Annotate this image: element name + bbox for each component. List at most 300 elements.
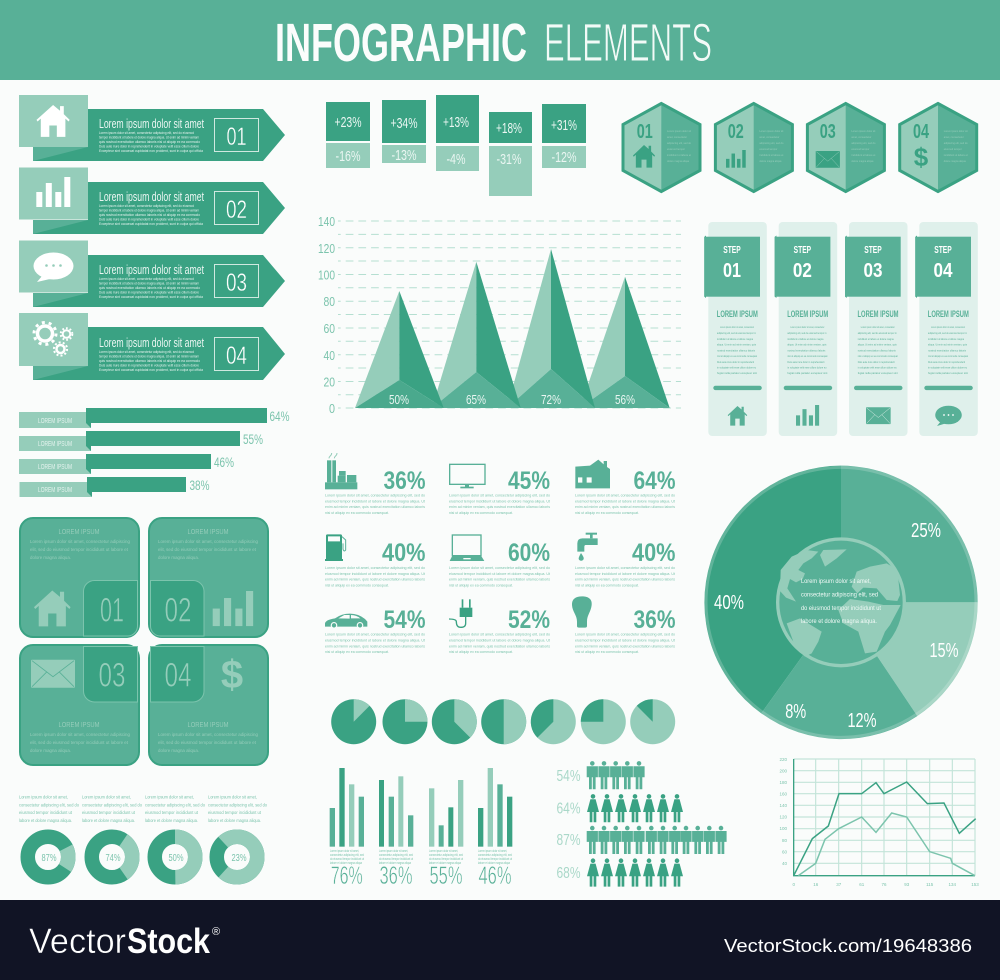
- step card 04: nisi ut aliquip ex ea commodo consequat: [928, 354, 968, 358]
- step card 04: nostrud exercitation ullamco laboris: [928, 348, 966, 352]
- triangle 56%: [580, 277, 670, 408]
- y axis labels: 60: [324, 321, 335, 336]
- title: ELEMENTS: [544, 13, 712, 73]
- pie 7: [630, 699, 675, 744]
- banner 03: 03: [226, 269, 247, 297]
- step card 03: STEP: [864, 244, 882, 256]
- stat texts: Lorem ipsum dolor sit amet, consectetur adipiscing elit, sed do: [449, 632, 550, 636]
- step card 01: Lorem ipsum dolor sit amet, consectetur: [720, 325, 754, 329]
- header band: [0, 0, 1000, 80]
- icon: house: [34, 590, 71, 626]
- slice 12% and 8%: [761, 602, 917, 739]
- step card 04: [915, 222, 978, 436]
- step card 04: in voluptate velit esse cillum dolore eu: [928, 366, 967, 370]
- stat texts: nisi ut aliquip ex ea commodo consequat.: [575, 511, 639, 515]
- triangle 65%: [432, 262, 521, 408]
- step card 04: aliqua. Ut enim ad minim veniam, quis: [928, 342, 967, 346]
- slice 15%: [841, 602, 978, 716]
- panel: tile 02: [149, 518, 268, 637]
- banner 03: [19, 240, 285, 307]
- banner 02: 02: [226, 196, 247, 224]
- bar group captions: labore et dolore magna aliqua: [429, 861, 461, 865]
- panel: tile 01: [20, 518, 139, 637]
- line chart: [779, 757, 979, 887]
- hexagon 02: 02: [728, 121, 744, 143]
- step card 04: adipiscing elit, sed do eiusmod tempor in: [928, 331, 967, 335]
- step card 03: LOREM IPSUM: [858, 309, 898, 319]
- banner title: Lorem ipsum dolor sit amet: [99, 335, 204, 350]
- step card 02: STEP: [794, 244, 811, 256]
- slice labels: 12%: [848, 710, 877, 732]
- stat texts: [325, 494, 675, 654]
- banner title: Lorem ipsum dolor sit amet: [99, 262, 204, 277]
- panel: tile 01: 01: [100, 592, 124, 630]
- up and down percentage boxes: +18%: [496, 121, 522, 137]
- banner text: Duis aute irure dolor in reprehenderit in voluptate velit esse cillum dolore: [99, 364, 199, 368]
- hexagon 01: Lorem ipsum dolor sit: [667, 129, 691, 133]
- pie 6: [581, 699, 626, 744]
- row of women 68%: [587, 858, 683, 887]
- banner text: [99, 204, 203, 226]
- people pictogram: [556, 761, 727, 887]
- horizontal bar list: LOREM IPSUM: [38, 416, 72, 425]
- icon: monitor: [450, 464, 485, 488]
- stat texts: Lorem ipsum dolor sit amet, consectetur adipiscing elit, sed do: [449, 566, 550, 570]
- icon: house: [633, 145, 655, 168]
- slice labels: 40%: [714, 592, 744, 614]
- hexagon 03: Lorem ipsum dolor sit: [851, 129, 876, 133]
- hexagon 03: eiusmod tempor: [851, 147, 869, 151]
- donut 50%: 50%: [168, 853, 184, 864]
- panel: tile 01: LOREM IPSUM: [58, 529, 100, 536]
- step card 02: aliqua. Ut enim ad minim veniam, quis: [787, 342, 827, 346]
- bar group captions: consectetur adipiscing elit, sed: [330, 853, 364, 857]
- up and down percentage boxes: -31%: [496, 152, 522, 168]
- people labels: [556, 768, 580, 882]
- number box: [84, 580, 138, 636]
- step card 02: fugiat nulla pariatur excepteur sint: [787, 371, 828, 375]
- footer logo: ®: [212, 926, 220, 938]
- percent numbers: 36%: [384, 467, 426, 495]
- text blocks above donuts: Lorem ipsum dolor sit amet,: [145, 794, 194, 800]
- percent numbers: 54%: [384, 606, 426, 634]
- globe: [778, 539, 904, 666]
- step card 02: [775, 222, 837, 436]
- banner text: tempor incididunt ut labore et dolore magna aliqua. Ut enim ad minim veniam: [99, 208, 199, 212]
- footer logo: [29, 922, 220, 961]
- hexagon 01: 01: [637, 121, 653, 143]
- text blocks above donuts: eiusmod tempor incididunt ut: [19, 810, 73, 815]
- bar group captions: Lorem ipsum dolor sit amet,: [379, 849, 408, 853]
- bar group captions: Lorem ipsum dolor sit amet,: [330, 849, 359, 853]
- step card 04: Lorem ipsum dolor sit amet, consectetur: [931, 325, 965, 329]
- chart axis labels: 76: [881, 882, 887, 887]
- chart axis labels: 80: [782, 838, 787, 843]
- banner text: tempor incididunt ut labore et dolore magna aliqua. Ut enim ad minim veniam: [99, 354, 199, 358]
- step card 03: nisi ut aliquip ex ea commodo consequat: [858, 354, 898, 358]
- banner text: Duis aute irure dolor in reprehenderit in voluptate velit esse cillum dolore: [99, 290, 199, 294]
- step card 03: aliqua. Ut enim ad minim veniam, quis: [858, 342, 897, 346]
- globe text: do eiusmod tempor incididunt ut: [801, 605, 881, 612]
- stat texts: eiusmod tempor incididunt ut labore et dolore magna aliqua. Ut: [449, 500, 550, 504]
- step card 01: in voluptate velit esse cillum dolore eu: [717, 366, 756, 370]
- banner text: [99, 277, 203, 299]
- y axis labels: 100: [318, 268, 335, 282]
- panel: tile 03: 03: [98, 656, 126, 694]
- hexagon 02: eiusmod tempor: [759, 147, 777, 151]
- step card 03: [845, 222, 908, 436]
- hexagon 02: amet, consectetur: [759, 135, 779, 139]
- up and down percentage boxes: +31%: [551, 118, 577, 134]
- banner text: quis nostrud exercitation ullamco laboris nisi ut aliquip ex ea commodo: [99, 286, 200, 290]
- panel: tile 04: LOREM IPSUM: [188, 722, 229, 729]
- slice 25%: [841, 466, 978, 602]
- stat texts: enim ad minim veniam, quis nostrud exercitation ullamco laboris: [575, 505, 675, 509]
- step card 04: LOREM IPSUM: [928, 309, 969, 319]
- step card 04: STEP: [934, 244, 952, 256]
- horizontal bar list: 55%: [243, 432, 263, 447]
- chart axis labels: 40: [782, 861, 787, 866]
- bar group percents: 36%: [380, 862, 412, 890]
- hexagon 02: incididunt ut labore et: [759, 153, 784, 157]
- stat texts: enim ad minim veniam, quis nostrud exercitation ullamco laboris: [575, 578, 675, 582]
- bar group captions: Lorem ipsum dolor sit amet,: [478, 849, 507, 853]
- percent numbers: 52%: [508, 606, 550, 634]
- up and down percentage boxes: +34%: [390, 116, 418, 132]
- stat texts: eiusmod tempor incididunt ut labore et dolore magna aliqua. Ut: [449, 572, 550, 576]
- row of men 87%: [587, 826, 727, 854]
- stat texts: enim ad minim veniam, quis nostrud exercitation ullamco laboris: [449, 644, 550, 648]
- chart axis labels: 153: [971, 882, 979, 887]
- y axis labels: 120: [318, 241, 335, 256]
- step card 03: nostrud exercitation ullamco laboris: [858, 348, 896, 352]
- step card 02: Lorem ipsum dolor sit amet, consectetur: [790, 325, 824, 329]
- big globe pie chart: [704, 466, 978, 739]
- panel: tile 01: elit, sed do eiusmod tempor incididunt ut labore et: [30, 547, 129, 552]
- pie row: [331, 699, 675, 744]
- up and down percentage boxes: -4%: [446, 152, 466, 168]
- panel: tile 03: dolore magna aliqua.: [30, 748, 71, 753]
- text blocks above donuts: consectetur adipiscing elit, sed do: [19, 802, 80, 808]
- bar groups: [330, 768, 512, 890]
- pie 3: [432, 699, 477, 744]
- text blocks above donuts: eiusmod tempor incididunt ut: [208, 810, 262, 815]
- footer logo: Stock: [127, 922, 210, 961]
- pie 4: [481, 699, 526, 744]
- globe text: [801, 578, 881, 625]
- icon: factory: [325, 453, 357, 489]
- icon: house: [728, 406, 747, 426]
- step card 02: Duis aute irure dolor in reprehenderit: [787, 360, 825, 364]
- stat icons: [325, 453, 610, 629]
- step card 02: adipiscing elit, sed do eiusmod tempor in: [787, 331, 827, 335]
- hexagon 01: eiusmod tempor: [667, 147, 685, 151]
- stat texts: Lorem ipsum dolor sit amet, consectetur adipiscing elit, sed do: [325, 494, 425, 498]
- stat texts: nisi ut aliquip ex ea commodo consequat.: [325, 650, 389, 654]
- hexagon 04: [899, 102, 978, 193]
- banner 04: 04: [226, 342, 247, 370]
- number box: [214, 338, 258, 370]
- banner text: [99, 350, 203, 372]
- stat texts: nisi ut aliquip ex ea commodo consequat.: [575, 584, 639, 588]
- hexagon 03: dolore magna aliqua: [851, 159, 874, 163]
- text blocks above donuts: Lorem ipsum dolor sit amet,: [82, 794, 131, 800]
- triangle 50%: 50%: [389, 393, 409, 407]
- panel: tile 04: Lorem ipsum dolor sit amet, consectetur adipiscing: [158, 732, 258, 737]
- step card 03: Duis aute irure dolor in reprehenderit: [858, 360, 895, 364]
- stat texts: nisi ut aliquip ex ea commodo consequat.: [449, 511, 513, 515]
- banner text: Lorem ipsum dolor sit amet, consectetur adipiscing elit, sed do eiusmod: [99, 277, 194, 281]
- y axis labels: [318, 214, 335, 416]
- icon: bars: [726, 150, 746, 168]
- pie 5: [531, 699, 576, 744]
- text blocks above donuts: Lorem ipsum dolor sit amet,: [208, 794, 257, 800]
- banner text: tempor incididunt ut labore et dolore magna aliqua. Ut enim ad minim veniam: [99, 136, 199, 140]
- stat texts: Lorem ipsum dolor sit amet, consectetur adipiscing elit, sed do: [449, 494, 550, 498]
- triangle 65%: 65%: [466, 393, 486, 407]
- stat texts: enim ad minim veniam, quis nostrud exercitation ullamco laboris: [325, 644, 425, 648]
- stats grid: [325, 453, 676, 654]
- stat texts: nisi ut aliquip ex ea commodo consequat.: [449, 650, 513, 654]
- step card 02: in voluptate velit esse cillum dolore eu: [787, 366, 827, 370]
- icon: plug: [449, 599, 472, 627]
- stat texts: Lorem ipsum dolor sit amet, consectetur adipiscing elit, sed do: [575, 494, 675, 498]
- hexagon 04: eiusmod tempor: [944, 147, 962, 151]
- chart axis labels: [779, 757, 979, 887]
- stat texts: nisi ut aliquip ex ea commodo consequat.: [325, 511, 389, 515]
- banner title: Lorem ipsum dolor sit amet: [99, 189, 204, 204]
- step card 01: adipiscing elit, sed do eiusmod tempor in: [717, 331, 756, 335]
- people labels: 87%: [556, 832, 580, 849]
- chart axis labels: 180: [779, 780, 787, 785]
- hexagon 03: adipiscing elit, sed do: [851, 141, 876, 145]
- bar group captions: labore et dolore magna aliqua: [379, 861, 411, 865]
- bar group captions: labore et dolore magna aliqua: [478, 861, 510, 865]
- panel: tile 04: dolore magna aliqua.: [158, 748, 199, 753]
- banner text: Duis aute irure dolor in reprehenderit in voluptate velit esse cillum dolore: [99, 218, 199, 222]
- people labels: 54%: [556, 768, 580, 785]
- hexagon 02: Lorem ipsum dolor sit: [759, 129, 784, 133]
- step card 03: adipiscing elit, sed do eiusmod tempor in: [858, 331, 897, 335]
- triangle 72%: [507, 249, 595, 408]
- bar group captions: labore et dolore magna aliqua: [330, 861, 362, 865]
- stat texts: eiusmod tempor incididunt ut labore et dolore magna aliqua. Ut: [325, 638, 425, 642]
- step card 01: fugiat nulla pariatur excepteur sint: [717, 371, 757, 375]
- banner text: Lorem ipsum dolor sit amet, consectetur adipiscing elit, sed do eiusmod: [99, 350, 194, 354]
- text blocks above donuts: consectetur adipiscing elit, sed do: [82, 802, 143, 808]
- up and down percentage boxes: -13%: [392, 148, 417, 164]
- step card 02: nisi ut aliquip ex ea commodo consequat: [787, 354, 828, 358]
- chart axis labels: 160: [779, 792, 787, 796]
- y axis labels: 20: [324, 374, 335, 390]
- footer logo: Vector: [29, 922, 126, 961]
- stat texts: eiusmod tempor incididunt ut labore et dolore magna aliqua. Ut: [575, 638, 675, 642]
- bar group percents: 46%: [478, 862, 512, 890]
- triangle 72%: 72%: [541, 393, 561, 407]
- y axis labels: 40: [324, 348, 335, 363]
- stat texts: enim ad minim veniam, quis nostrud exercitation ullamco laboris: [325, 578, 425, 582]
- panel: tile 04: elit, sed do eiusmod tempor incididunt ut labore et: [158, 740, 257, 745]
- icon: speech bubble: [34, 252, 74, 282]
- bar group 3: [429, 780, 463, 847]
- hexagon 04: amet, consectetur: [944, 135, 964, 139]
- hexagon 01: incididunt ut labore et: [667, 153, 691, 157]
- text blocks above donuts: eiusmod tempor incididunt ut: [145, 810, 199, 815]
- banner text: [99, 131, 203, 153]
- chart axis labels: 37: [836, 882, 842, 887]
- step card 01: aliqua. Ut enim ad minim veniam, quis: [717, 342, 756, 346]
- number box: [214, 264, 258, 298]
- hexagon 03: 03: [820, 121, 836, 143]
- hexagon 04: Lorem ipsum dolor sit: [944, 129, 968, 133]
- step card 04: fugiat nulla pariatur excepteur sint: [928, 371, 968, 375]
- stat texts: Lorem ipsum dolor sit amet, consectetur adipiscing elit, sed do: [575, 566, 675, 570]
- globe text: labore et dolore magna aliqua.: [801, 618, 877, 625]
- icon: bars: [213, 591, 253, 626]
- hexagon 03: incididunt ut labore et: [851, 153, 876, 157]
- chart axis labels: 200: [779, 768, 787, 774]
- donut 87%: 87%: [42, 853, 57, 864]
- step card 01: LOREM IPSUM: [717, 309, 758, 319]
- stat texts: enim ad minim veniam, quis nostrud exercitation ullamco laboris: [449, 505, 550, 509]
- icon: envelope: [866, 407, 891, 424]
- bar group captions: [330, 849, 512, 865]
- step card 03: fugiat nulla pariatur excepteur sint: [858, 371, 898, 375]
- stat texts: eiusmod tempor incididunt ut labore et dolore magna aliqua. Ut: [575, 572, 675, 576]
- bar group captions: consectetur adipiscing elit, sed: [478, 853, 512, 857]
- y axis labels: 140: [318, 214, 335, 229]
- icon: house: [36, 105, 70, 137]
- stat texts: eiusmod tempor incididunt ut labore et dolore magna aliqua. Ut: [449, 638, 550, 642]
- up and down percentage boxes: -16%: [336, 149, 361, 165]
- panel: tile 01: dolore magna aliqua.: [30, 555, 71, 560]
- hexagon 04: dolore magna aliqua: [944, 159, 966, 163]
- slice labels: 8%: [785, 701, 806, 723]
- panel: tile 01: Lorem ipsum dolor sit amet, consectetur adipiscing: [30, 539, 130, 544]
- bar group percents: 76%: [331, 862, 363, 890]
- hexagon 04: 04: [913, 121, 930, 143]
- hexagon 02: [714, 102, 793, 193]
- icon: laptop: [450, 535, 484, 561]
- slice labels: 15%: [930, 640, 959, 662]
- chart axis labels: 60: [782, 850, 787, 854]
- bar group percents: 55%: [430, 862, 462, 890]
- icon: gears: [34, 322, 72, 356]
- bar group 4: [478, 768, 512, 847]
- number box: [84, 646, 138, 702]
- stat texts: enim ad minim veniam, quis nostrud exercitation ullamco laboris: [449, 578, 550, 582]
- step card 04: Duis aute irure dolor in reprehenderit: [928, 360, 965, 364]
- panel: tile 02: 02: [164, 592, 192, 630]
- bar group captions: do eiusmod tempor incididunt ut: [429, 857, 463, 861]
- bar group 1: [330, 768, 364, 847]
- title: INFOGRAPHIC: [275, 13, 527, 73]
- step card 03: incididunt ut labore et dolore magna: [858, 337, 894, 341]
- slice labels: [714, 520, 959, 732]
- banner text: Duis aute irure dolor in reprehenderit in voluptate velit esse cillum dolore: [99, 144, 199, 148]
- banner text: Excepteur sint occaecat cupidatat non proident, sunt in culpa qui officia: [99, 149, 203, 153]
- hexagon 02: adipiscing elit, sed do: [759, 141, 784, 145]
- stat texts: eiusmod tempor incididunt ut labore et dolore magna aliqua. Ut: [325, 500, 425, 504]
- banner text: quis nostrud exercitation ullamco laboris nisi ut aliquip ex ea commodo: [99, 359, 200, 363]
- panel: tile 03: [20, 645, 139, 765]
- bar group captions: consectetur adipiscing elit, sed: [429, 853, 463, 857]
- step card 01: nisi ut aliquip ex ea commodo consequat: [717, 354, 757, 358]
- footer band: [0, 900, 1000, 980]
- chart axis labels: 120: [779, 814, 787, 820]
- banner text: Excepteur sint occaecat cupidatat non proident, sunt in culpa qui officia: [99, 368, 203, 372]
- pie 2: [382, 699, 428, 744]
- slice labels: 25%: [911, 520, 941, 542]
- banner 02: [19, 168, 285, 234]
- step card 02: 02: [793, 260, 812, 282]
- icon: speech bubble: [935, 406, 962, 426]
- hexagon 01: amet, consectetur: [667, 135, 687, 139]
- banner text: quis nostrud exercitation ullamco laboris nisi ut aliquip ex ea commodo: [99, 140, 200, 144]
- panel: tile 02: dolore magna aliqua.: [158, 555, 199, 560]
- icon: dollar: $: [914, 142, 929, 172]
- banner title: Lorem ipsum dolor sit amet: [99, 116, 204, 131]
- percent numbers: 45%: [508, 467, 550, 495]
- panel: tile 04: [149, 645, 268, 765]
- step card 02: incididunt ut labore et dolore magna: [787, 337, 824, 341]
- icon: bars: [36, 177, 70, 207]
- up and down percentage boxes: -12%: [552, 150, 577, 166]
- icon: bars: [796, 405, 819, 426]
- panel: tile 02: Lorem ipsum dolor sit amet, consectetur adipiscing: [158, 539, 258, 544]
- globe text: Lorem ipsum dolor sit amet,: [801, 578, 871, 585]
- step card 03: Lorem ipsum dolor sit amet, consectetur: [861, 325, 895, 329]
- pie 1: [331, 699, 376, 744]
- horizontal bar list: 38%: [190, 478, 210, 493]
- slice 40%: [704, 466, 841, 713]
- text blocks above donuts: consectetur adipiscing elit, sed do: [208, 802, 268, 808]
- text blocks above donuts: labore et dolore magna aliqua.: [208, 818, 261, 823]
- text blocks above donuts: consectetur adipiscing elit, sed do: [145, 802, 206, 808]
- banner text: tempor incididunt ut labore et dolore magna aliqua. Ut enim ad minim veniam: [99, 282, 199, 286]
- step card 04: incididunt ut labore et dolore magna: [928, 337, 964, 341]
- text blocks above donuts: eiusmod tempor incididunt ut: [82, 810, 136, 815]
- chart axis labels: 140: [779, 803, 787, 808]
- hexagon 04: adipiscing elit, sed do: [944, 141, 968, 145]
- chart axis labels: 134: [949, 882, 957, 887]
- icon: envelope: [816, 151, 840, 168]
- percent numbers: 40%: [632, 539, 676, 567]
- icon: house: [575, 460, 610, 488]
- horizontal bar list: 46%: [214, 455, 234, 470]
- donut 87%: [21, 830, 75, 884]
- stat texts: Lorem ipsum dolor sit amet, consectetur adipiscing elit, sed do: [575, 632, 675, 636]
- footer url: VectorStock.com/19648386: [724, 936, 972, 956]
- chart axis labels: 93: [904, 882, 910, 887]
- icon: light bulb: [572, 596, 592, 628]
- stat texts: eiusmod tempor incididunt ut labore et dolore magna aliqua. Ut: [575, 500, 675, 504]
- banner 01: 01: [226, 123, 246, 151]
- text blocks above donuts: labore et dolore magna aliqua.: [19, 818, 72, 823]
- bar group captions: do eiusmod tempor incididunt ut: [478, 857, 512, 861]
- horizontal bar list: LOREM IPSUM: [38, 485, 72, 494]
- hexagon 03: amet, consectetur: [851, 135, 871, 139]
- percent numbers: 36%: [634, 606, 676, 634]
- step card 01: STEP: [723, 244, 741, 256]
- percent numbers: [382, 467, 676, 634]
- text blocks above donuts: Lorem ipsum dolor sit amet,: [19, 794, 68, 800]
- chart axis labels: 0: [792, 882, 795, 887]
- number box: [150, 580, 204, 636]
- chart axis labels: 16: [813, 882, 819, 887]
- panel: tile 04: 04: [164, 656, 192, 694]
- banner text: Lorem ipsum dolor sit amet, consectetur adipiscing elit, sed do eiusmod: [99, 204, 194, 208]
